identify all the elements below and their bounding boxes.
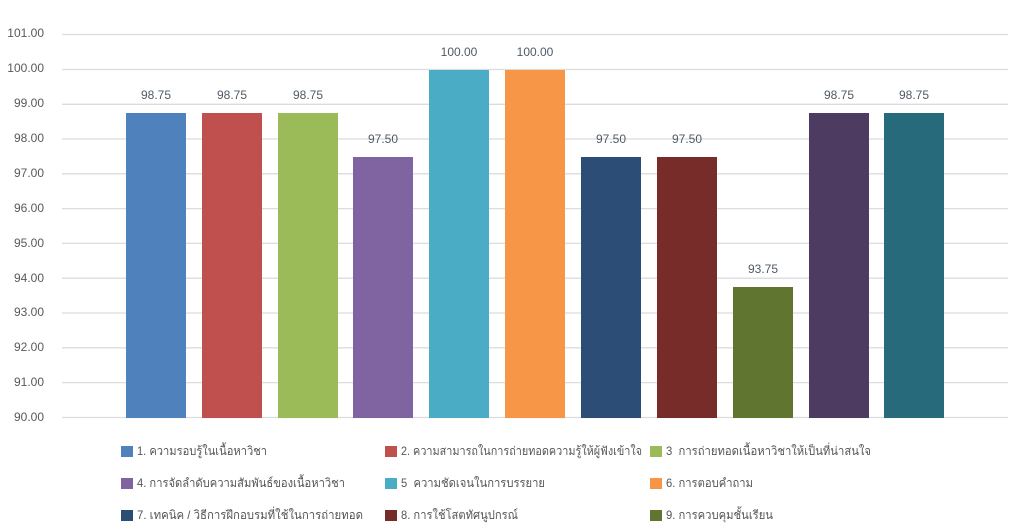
- value labels: 97.50: [672, 132, 702, 146]
- y axis labels: 94.00: [14, 271, 44, 285]
- legend: 9. การควบคุมชั้นเรียน: [666, 506, 773, 523]
- bars: [126, 70, 944, 418]
- legend: [121, 442, 871, 523]
- legend: 5 ความชัดเจนในการบรรยาย: [401, 476, 545, 490]
- y axis labels: 100.00: [7, 61, 44, 75]
- value labels: 97.50: [368, 132, 398, 146]
- y axis labels: [7, 26, 44, 424]
- y axis labels: 101.00: [7, 26, 44, 40]
- y axis labels: 93.00: [14, 305, 44, 319]
- y axis labels: 96.00: [14, 201, 44, 215]
- value labels: 100.00: [441, 45, 478, 59]
- value labels: 100.00: [517, 45, 554, 59]
- legend: 1. ความรอบรู้ในเนื้อหาวิชา: [137, 442, 267, 459]
- value labels: 97.50: [596, 132, 626, 146]
- value labels: 93.75: [748, 262, 778, 276]
- value labels: [141, 45, 929, 276]
- legend: 3 การถ่ายทอดเนื้อหาวิชาให้เป็นที่น่าสนใจ: [666, 442, 871, 458]
- legend: 2. ความสามารถในการถ่ายทอดความรู้ให้ผู้ฟังเข้าใจ: [401, 444, 642, 459]
- y axis labels: 97.00: [14, 166, 44, 180]
- y axis labels: 98.00: [14, 131, 44, 145]
- y axis labels: 99.00: [14, 96, 44, 110]
- value labels: 98.75: [899, 88, 929, 102]
- y axis labels: 90.00: [14, 410, 44, 424]
- value labels: 98.75: [141, 88, 171, 102]
- value labels: 98.75: [217, 88, 247, 102]
- y axis labels: 92.00: [14, 340, 44, 354]
- legend: 8. การใช้โสตทัศนูปกรณ์: [401, 508, 518, 523]
- value labels: 98.75: [293, 88, 323, 102]
- y axis labels: 91.00: [14, 375, 44, 389]
- value labels: 98.75: [824, 88, 854, 102]
- legend: 7. เทคนิค / วิธีการฝึกอบรมที่ใช้ในการถ่ายทอด: [137, 506, 363, 522]
- y axis labels: 95.00: [14, 236, 44, 250]
- legend: 6. การตอบคำถาม: [666, 476, 753, 490]
- legend: 4. การจัดลำดับความสัมพันธ์ของเนื้อหาวิชา: [137, 474, 345, 490]
